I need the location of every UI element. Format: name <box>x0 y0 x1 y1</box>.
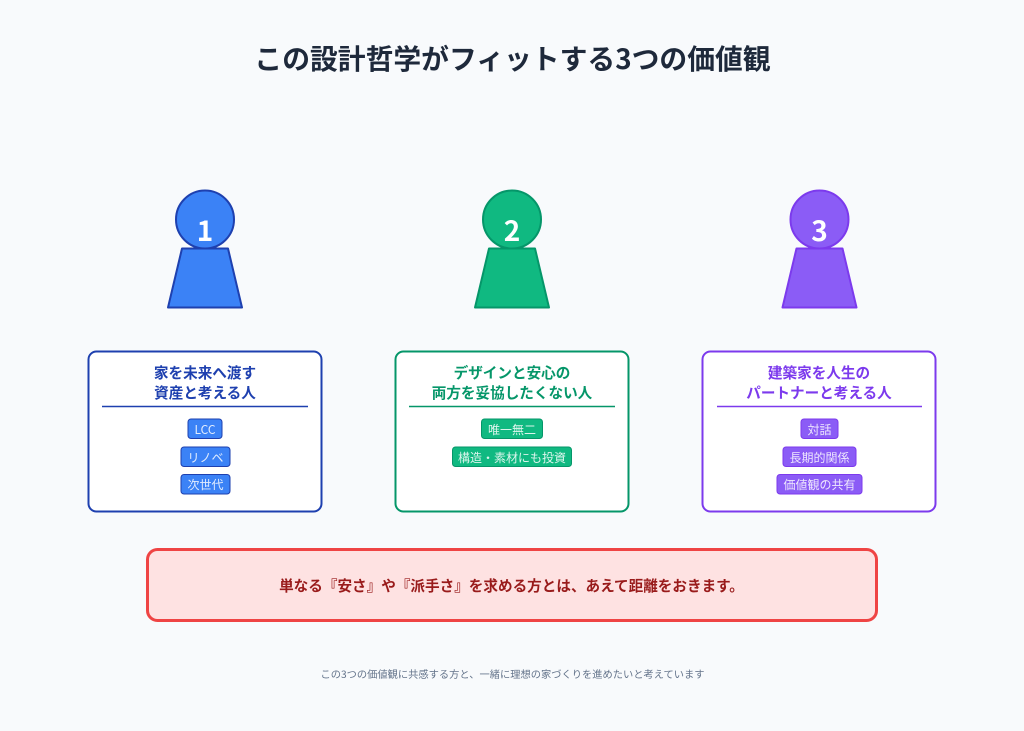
figure 3: purple person: 3 <box>811 210 828 250</box>
panel: card 2 <box>396 352 628 512</box>
footer text: この3つの価値観に共感する方と、一緒に理想の家づくりを進めたいと考えています <box>320 666 705 681</box>
tag: 次世代 <box>181 474 230 494</box>
tag: リノベ: リノベ <box>187 449 224 466</box>
card 1 heading: 資産と考える人 <box>154 382 256 403</box>
figure 1: blue person <box>168 190 242 308</box>
figure 2: green person: 2 <box>504 210 520 250</box>
tag: 唯一無二 <box>482 419 542 438</box>
tag: リノベ <box>181 447 230 466</box>
tag: LCC <box>188 419 222 438</box>
card 3 heading: パートナーと考える人 <box>746 382 892 403</box>
title: この設計哲学がフィットする3つの価値観 <box>254 38 771 78</box>
tag: 次世代: 次世代 <box>187 476 224 493</box>
figure 1: blue person: 1 <box>197 210 213 250</box>
tag: 対話 <box>801 419 838 438</box>
figure 3: purple person <box>782 190 856 308</box>
tag: 構造・素材にも投資: 構造・素材にも投資 <box>458 449 566 466</box>
tag: 長期的関係: 長期的関係 <box>789 449 850 466</box>
card 2 heading: 両方を妥協したくない人 <box>432 382 593 403</box>
panel: card 3 <box>702 352 936 512</box>
tag: 対話: 対話 <box>807 421 832 438</box>
card 3 heading: 建築家を人生の <box>768 362 870 383</box>
tag: LCC: LCC <box>194 421 216 438</box>
callout: warning banner <box>148 550 876 620</box>
card 2 heading: デザインと安心の <box>454 362 570 383</box>
tag: 価値観の共有: 価値観の共有 <box>783 476 856 493</box>
callout: warning banner: 単なる『安さ』や『派手さ』を求める方とは、あえて距離をおきます。 <box>279 575 744 596</box>
panel: card 1 <box>88 352 322 512</box>
card 1 heading: 家を未来へ渡す <box>154 362 256 383</box>
figure 2: green person <box>475 190 549 308</box>
tag: 唯一無二: 唯一無二 <box>488 421 536 438</box>
